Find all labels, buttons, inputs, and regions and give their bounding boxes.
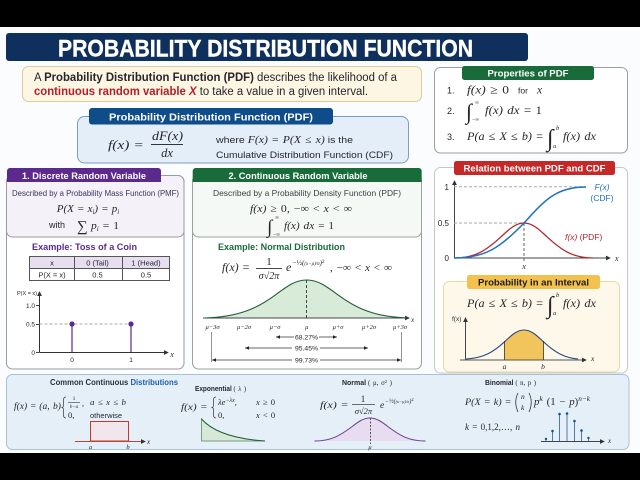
chart: normal curve: μ+σ	[333, 324, 344, 331]
chart: PMF stems: 0	[31, 350, 35, 357]
sub-panel: PMF definition	[6, 176, 184, 237]
formula: f(x) derivative: dF(x)	[152, 129, 183, 143]
sub-panel: PMF definition: ∑	[77, 219, 88, 235]
chart: PDF and CDF curves	[438, 181, 619, 271]
formula: normal density: 1	[266, 256, 272, 268]
chart: PMF stems: 1.0	[26, 303, 35, 310]
property 1: x	[536, 84, 543, 96]
heading: normal example: Example: Normal Distribution	[218, 242, 345, 253]
formula: normal density	[222, 256, 392, 282]
formula: f(x) derivative: dx	[161, 146, 173, 160]
formula: exponential: x ≥ 0	[255, 397, 275, 407]
chart: normal curve: μ−2σ	[237, 324, 252, 331]
chart: normal curve: μ+3σ	[393, 324, 408, 331]
formula: exponential: f(x) =	[181, 402, 207, 413]
table: coin toss probabilities: x	[50, 258, 54, 268]
chart: normal curve	[203, 280, 415, 331]
chart: sigma coverage arrows: 99.73%	[295, 358, 318, 364]
formula: binomial: n−k	[578, 395, 591, 403]
formula: uniform: ,	[82, 399, 84, 408]
intro definition box: continuous random variable X to take a value in a given interval.	[34, 86, 368, 98]
formula: interval probability: a	[553, 310, 556, 317]
chart: PMF stems: P(X = x)	[17, 291, 37, 297]
sub-panel: PMF definition: with	[48, 220, 65, 230]
formula: exponential: ,	[235, 397, 237, 407]
formula: exponential: −λx	[225, 398, 235, 404]
formula: uniform: f(x) = (a, b)	[14, 401, 61, 412]
formula: normal density: f(x) =	[222, 260, 250, 274]
property 2	[447, 99, 542, 125]
chart: binomial stems	[541, 412, 612, 445]
chart: uniform density: x	[146, 438, 151, 446]
formula: normal	[320, 394, 414, 416]
panel: common continuous distributions	[6, 374, 629, 451]
chart: PDF and CDF curves: f(x) (PDF)	[565, 232, 602, 242]
sub-panel: PDF conditions: −∞	[273, 232, 280, 238]
chart: shaded interval: x	[590, 354, 595, 363]
property 3: f(x) dx	[563, 131, 597, 143]
chart: PMF stems: 1	[129, 357, 133, 364]
property 3: ∫	[545, 126, 555, 153]
label: normal: Normal ( μ, σ² )	[342, 378, 392, 387]
formula: uniform: b−a	[70, 405, 79, 410]
sub-panel: PMF definition: p	[91, 220, 96, 232]
formula: normal density: , −∞ < x < ∞	[330, 262, 392, 274]
formula: interval probability: ∫	[545, 293, 555, 320]
formula: uniform	[14, 396, 126, 420]
chart: PDF and CDF curves: 0	[445, 254, 450, 263]
heading: coin example: Example: Toss of a Coin	[32, 242, 137, 253]
table: coin toss probabilities: 1 (Head)	[131, 258, 161, 268]
sub-panel: PMF definition: ) = p	[94, 203, 117, 215]
formula: binomial: p	[534, 397, 539, 408]
chart: exponential density	[202, 418, 265, 441]
formula: normal: 1	[361, 394, 365, 404]
label: binomial: Binomial ( n, p )	[485, 378, 536, 387]
property 2: f(x) dx = 1	[485, 105, 542, 117]
panel: continuous random variable	[192, 168, 422, 369]
chart: normal curve: μ−σ	[270, 324, 281, 331]
formula: binomial	[464, 392, 591, 432]
heading: green section label: 2. Continuous Random Variable	[228, 171, 368, 182]
panel: discrete random variable	[6, 168, 184, 369]
text: CDF explanation	[215, 135, 393, 161]
formula: exponential: x < 0	[255, 410, 275, 420]
chart: binomial stems: x	[607, 437, 612, 445]
property 3: b	[556, 125, 560, 132]
formula: exponential: 0,	[218, 410, 224, 420]
sub-panel: probability in an interval	[444, 275, 620, 372]
chart: normal curve: μ−3σ	[205, 324, 220, 331]
formula: binomial: (1 −	[543, 397, 566, 408]
chart: uniform density: a	[89, 444, 92, 451]
heading: PDF definition	[89, 108, 333, 124]
formula: interval probability: f(x) dx	[563, 298, 597, 310]
property 3: P(a ≤ X ≤ b) =	[466, 131, 543, 143]
table: coin toss probabilities: 0 (Tail)	[86, 258, 109, 268]
property 2: 2.	[447, 106, 455, 116]
intro definition box	[22, 66, 422, 102]
heading: properties	[462, 66, 594, 80]
property 1: 1.	[447, 86, 455, 96]
property 2: −∞	[472, 117, 479, 123]
formula: normal: σ√2π	[355, 406, 373, 416]
formula: normal density: −½((x−μ)/σ)	[292, 259, 322, 267]
chart: uniform density	[75, 422, 151, 451]
sub-panel: PMF definition: i	[97, 225, 99, 233]
formula: binomial: k	[521, 403, 525, 412]
formula: binomial: p)	[569, 397, 578, 408]
chart: sigma coverage arrows: 95.45%	[295, 346, 318, 352]
formula: uniform: 1	[73, 396, 76, 402]
panel: PDF definition	[78, 108, 408, 163]
chart: normal curve: x	[410, 316, 415, 324]
property 2: ∫	[464, 99, 474, 125]
table: coin toss probabilities: 0.5	[92, 270, 103, 280]
formula: normal density: e	[286, 260, 292, 274]
sub-panel: PDF conditions: Described by a Probability Density Function (PDF)	[213, 189, 401, 198]
sub-panel: PDF conditions: ∞	[275, 215, 279, 221]
title: PROBABILITY DISTRIBUTION FUNCTION	[58, 36, 473, 62]
chart: normal density: μ	[368, 444, 372, 451]
heading: interval: Probability in an Interval	[478, 278, 589, 288]
chart: normal curve: μ+2σ	[362, 324, 377, 331]
panel: relation between PDF and CDF	[434, 161, 628, 373]
formula: normal: −½((x−μ)/σ)	[385, 399, 411, 405]
chart: PDF and CDF curves: 0.5	[438, 219, 450, 228]
chart: PDF and CDF curves: x	[521, 262, 526, 271]
formula: interval probability	[466, 292, 597, 320]
heading: relation	[454, 161, 615, 175]
property 3: 3.	[447, 132, 455, 142]
chart: shaded interval: a	[503, 362, 507, 371]
chart: shaded interval: b	[541, 362, 545, 371]
property 1: for	[518, 86, 528, 96]
heading: common distributions: Common Continuous Distributions	[50, 378, 179, 387]
sub-panel: PDF conditions: f(x) ≥ 0, −∞ < x < ∞	[250, 203, 352, 215]
chart: PDF and CDF curves: F(x)	[594, 182, 610, 192]
formula: f(x) derivative: f(x) =	[108, 137, 143, 152]
heading: properties: Properties of PDF	[488, 68, 569, 80]
chart: shaded interval: f(x)	[452, 316, 461, 323]
formula: f(x) derivative	[108, 129, 183, 160]
sub-panel: PMF definition: P(X = x	[57, 203, 92, 215]
formula: uniform: otherwise	[90, 411, 122, 420]
formula: uniform: a ≤ x ≤ b	[90, 397, 126, 407]
intro definition box: A Probability Distribution Function (PDF) describes the likelihood of a	[34, 72, 398, 84]
panel: properties of PDF	[434, 66, 628, 153]
property 3	[447, 125, 597, 153]
label: exponential: Exponential ( λ )	[195, 384, 246, 393]
formula: binomial: k	[539, 394, 544, 403]
chart: PDF and CDF curves: (CDF)	[590, 193, 614, 203]
formula: normal: 2	[411, 397, 414, 402]
chart: PDF and CDF curves: x	[614, 254, 619, 263]
heading: purple section label: 1. Discrete Random Variable	[22, 171, 146, 182]
chart: shaded interval	[452, 316, 595, 371]
table: coin toss probabilities: P(X = x)	[38, 270, 66, 280]
sub-panel: PDF conditions	[192, 180, 422, 239]
sub-panel: PMF definition: i	[117, 208, 119, 216]
chart: sigma coverage arrows: 68.27%	[295, 334, 318, 342]
chart: normal curve: μ	[305, 324, 309, 331]
formula: interval probability: P(a ≤ X ≤ b) =	[466, 298, 543, 310]
formula: interval probability: b	[556, 292, 560, 299]
property 3: a	[553, 143, 556, 150]
table: coin toss probabilities: 0.5	[141, 270, 151, 280]
formula: normal density: σ√2π	[259, 271, 280, 282]
heading: green section label	[193, 168, 422, 182]
formula: normal: f(x) =	[320, 400, 348, 411]
chart: PDF and CDF curves: 1	[445, 183, 450, 192]
property 1	[447, 84, 543, 96]
sub-panel: PDF conditions: ∫	[266, 217, 274, 239]
heading: relation: Relation between PDF and CDF	[464, 164, 606, 174]
chart: PMF stems: x	[169, 350, 174, 359]
chart: PMF stems: 0	[70, 357, 74, 364]
chart: PMF stems	[17, 291, 174, 364]
formula: binomial: n	[521, 392, 525, 401]
property 1: f(x) ≥ 0	[467, 84, 509, 96]
chart: PMF stems: 0.5	[26, 322, 35, 328]
text: CDF explanation: where F(x) = P(X ≤ x) is the	[215, 135, 353, 146]
sub-panel: PMF definition: Described by a Probability Mass Function (PMF)	[12, 189, 179, 198]
formula: exponential	[181, 397, 275, 420]
heading: purple section label	[7, 168, 161, 182]
chart: uniform density: b	[126, 444, 130, 451]
formula: normal: e	[380, 401, 384, 411]
formula: exponential: λe	[218, 397, 225, 407]
sub-panel: PMF definition: = 1	[99, 220, 119, 232]
sub-panel: PMF definition: i	[92, 208, 94, 216]
heading: interval	[467, 275, 600, 289]
formula: normal density: 2	[322, 260, 325, 265]
chart: sigma coverage arrows	[212, 332, 402, 364]
formula: binomial: k = 0,1,2,…, n	[465, 422, 521, 432]
formula: uniform: 0,	[68, 410, 74, 420]
property 2: ∞	[475, 100, 479, 106]
heading: PDF definition: Probability Distribution Function (PDF)	[109, 112, 313, 124]
sub-panel: PDF conditions: f(x) dx = 1	[284, 220, 334, 232]
chart: normal density	[314, 418, 426, 451]
table: coin toss probabilities	[30, 256, 170, 280]
formula: binomial: P(X = k) =	[464, 397, 511, 407]
text: CDF explanation: Cumulative Distribution Function (CDF)	[216, 150, 393, 161]
